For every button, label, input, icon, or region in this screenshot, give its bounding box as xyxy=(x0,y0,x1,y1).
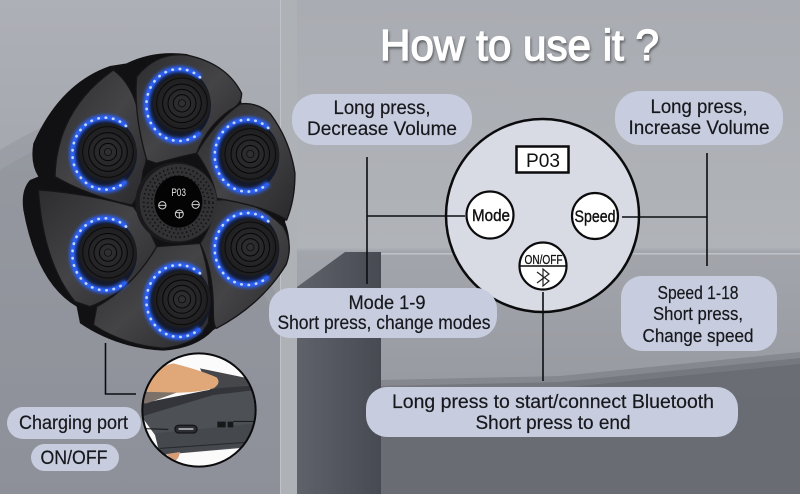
label: mode: Short press, change modes xyxy=(278,313,490,334)
button: on/off with bluetooth: ON/OFF xyxy=(524,252,563,267)
button: speed xyxy=(572,193,618,239)
label: mode xyxy=(269,288,497,338)
label: increase volume: Long press, xyxy=(650,97,748,118)
label: mode: Mode 1-9 xyxy=(348,293,426,314)
button: on/off with bluetooth xyxy=(520,242,566,290)
label: decrease volume: Decrease Volume xyxy=(307,119,457,140)
charging port leader line xyxy=(106,343,136,394)
label: on/off switch: ON/OFF xyxy=(40,448,108,469)
label: charging port: Charging port xyxy=(19,413,129,434)
button: mode xyxy=(466,192,514,238)
title: How to use it ? xyxy=(380,21,659,70)
label: increase volume: Increase Volume xyxy=(628,118,770,139)
speaker hub xyxy=(135,162,217,243)
label: charging port xyxy=(7,407,141,439)
label: speed: Speed 1-18 xyxy=(658,283,738,303)
display: P03: P03 xyxy=(526,151,560,172)
device display text: P03 xyxy=(171,187,186,199)
label: speed: Change speed xyxy=(642,326,754,346)
label: decrease volume xyxy=(292,94,472,145)
button: mode: Mode xyxy=(472,206,510,225)
device back silhouette xyxy=(23,53,295,351)
boxing machine device xyxy=(23,53,295,351)
label: decrease volume: Long press, xyxy=(334,98,430,119)
button: speed: Speed xyxy=(574,207,616,226)
label: bluetooth and power: Long press to start/connect Bluetooth xyxy=(392,392,714,413)
connector lines: speed and increase volume xyxy=(622,153,707,266)
display: P03 xyxy=(516,146,568,172)
label: speed: Short press, xyxy=(653,304,743,324)
label: bluetooth and power: Short press to end xyxy=(476,413,630,434)
petal pads xyxy=(38,55,295,348)
connector lines: mode and decrease volume xyxy=(367,157,465,284)
label: speed xyxy=(621,276,777,351)
label: on/off switch xyxy=(31,444,119,471)
label: increase volume xyxy=(615,91,783,145)
charging port close-up xyxy=(140,350,260,470)
control panel diagram xyxy=(446,119,639,312)
LED target pads xyxy=(146,69,211,141)
connector line: on/off xyxy=(542,292,544,381)
label: bluetooth and power xyxy=(366,387,738,437)
